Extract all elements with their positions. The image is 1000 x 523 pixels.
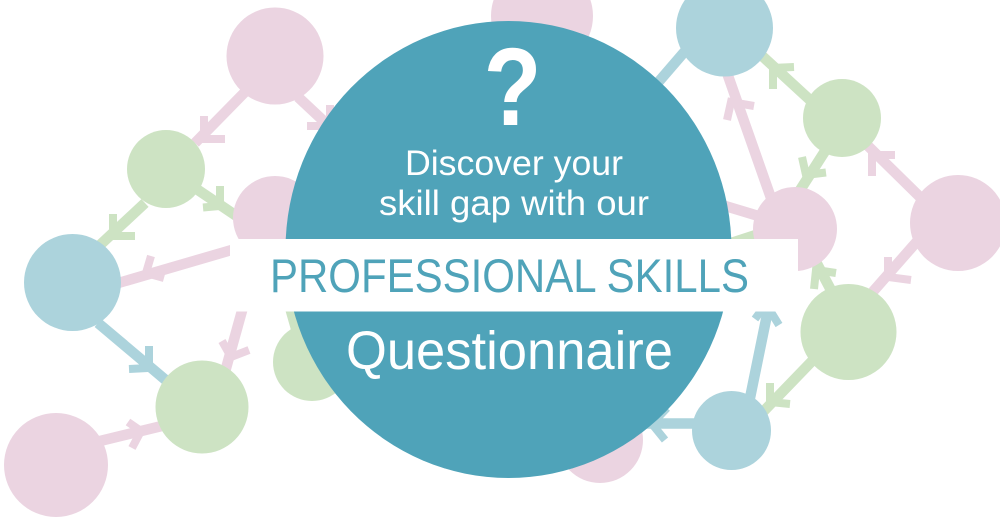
intro text: Discover your [405,144,623,183]
arrow: lower green to right-centre pink [814,260,836,292]
arrow: pink line into bottom green [222,300,249,372]
node: bottom pink [557,397,643,483]
node: right green [803,79,881,157]
arrow: centre pink to blue [115,249,235,284]
arrow: lower green to bottom blue [760,358,815,415]
connector: main circle to right-centre pink [722,205,765,218]
node: centre green [273,323,351,401]
arrow: left green to centre pink [198,186,238,217]
arrow: bottom pink to bottom green [100,422,166,448]
intro text [379,144,649,223]
arrow: blue to bottom green [98,323,168,382]
node: top blue [676,0,773,76]
node: top centre pink [491,0,593,67]
arrow: right-centre pink to top blue [726,70,771,198]
connector: centre pink to lower green [285,290,305,360]
arrow: left green to blue [100,203,145,245]
left skill network [4,8,351,517]
connector: green behind banner [725,232,765,245]
white banner [230,239,798,312]
arrow: top pink to centre pink [298,97,330,127]
arrow: right green to right-centre pink [795,148,827,198]
node: lower green [800,284,896,380]
arrow: bottom blue up to banner [750,304,779,398]
node: left green [127,130,205,208]
intro text: skill gap with our [379,184,649,223]
subtitle: Questionnaire [346,321,673,381]
node: right-centre pink [753,187,837,271]
node: bottom-left pink [4,413,108,517]
arrow: right pink to lower green [870,238,920,295]
main teal circle [286,21,732,478]
node: centre pink [233,176,317,260]
icon: question mark: ? [484,25,541,149]
node: bottom green [156,360,248,454]
arrow: right green to top blue [760,54,810,100]
node: bottom blue [692,391,771,470]
node: left blue [24,234,121,331]
arrow: right pink to right green [864,142,922,199]
arrow: top pink to left green [195,92,245,143]
banner heading: PROFESSIONAL SKILLS [270,249,749,302]
node: right pink [910,175,1000,271]
node: top pink [226,8,324,104]
arrow: bottom blue to bottom pink [645,408,695,440]
right skill network [491,0,1000,483]
connector: top blue to main circle [655,50,686,86]
